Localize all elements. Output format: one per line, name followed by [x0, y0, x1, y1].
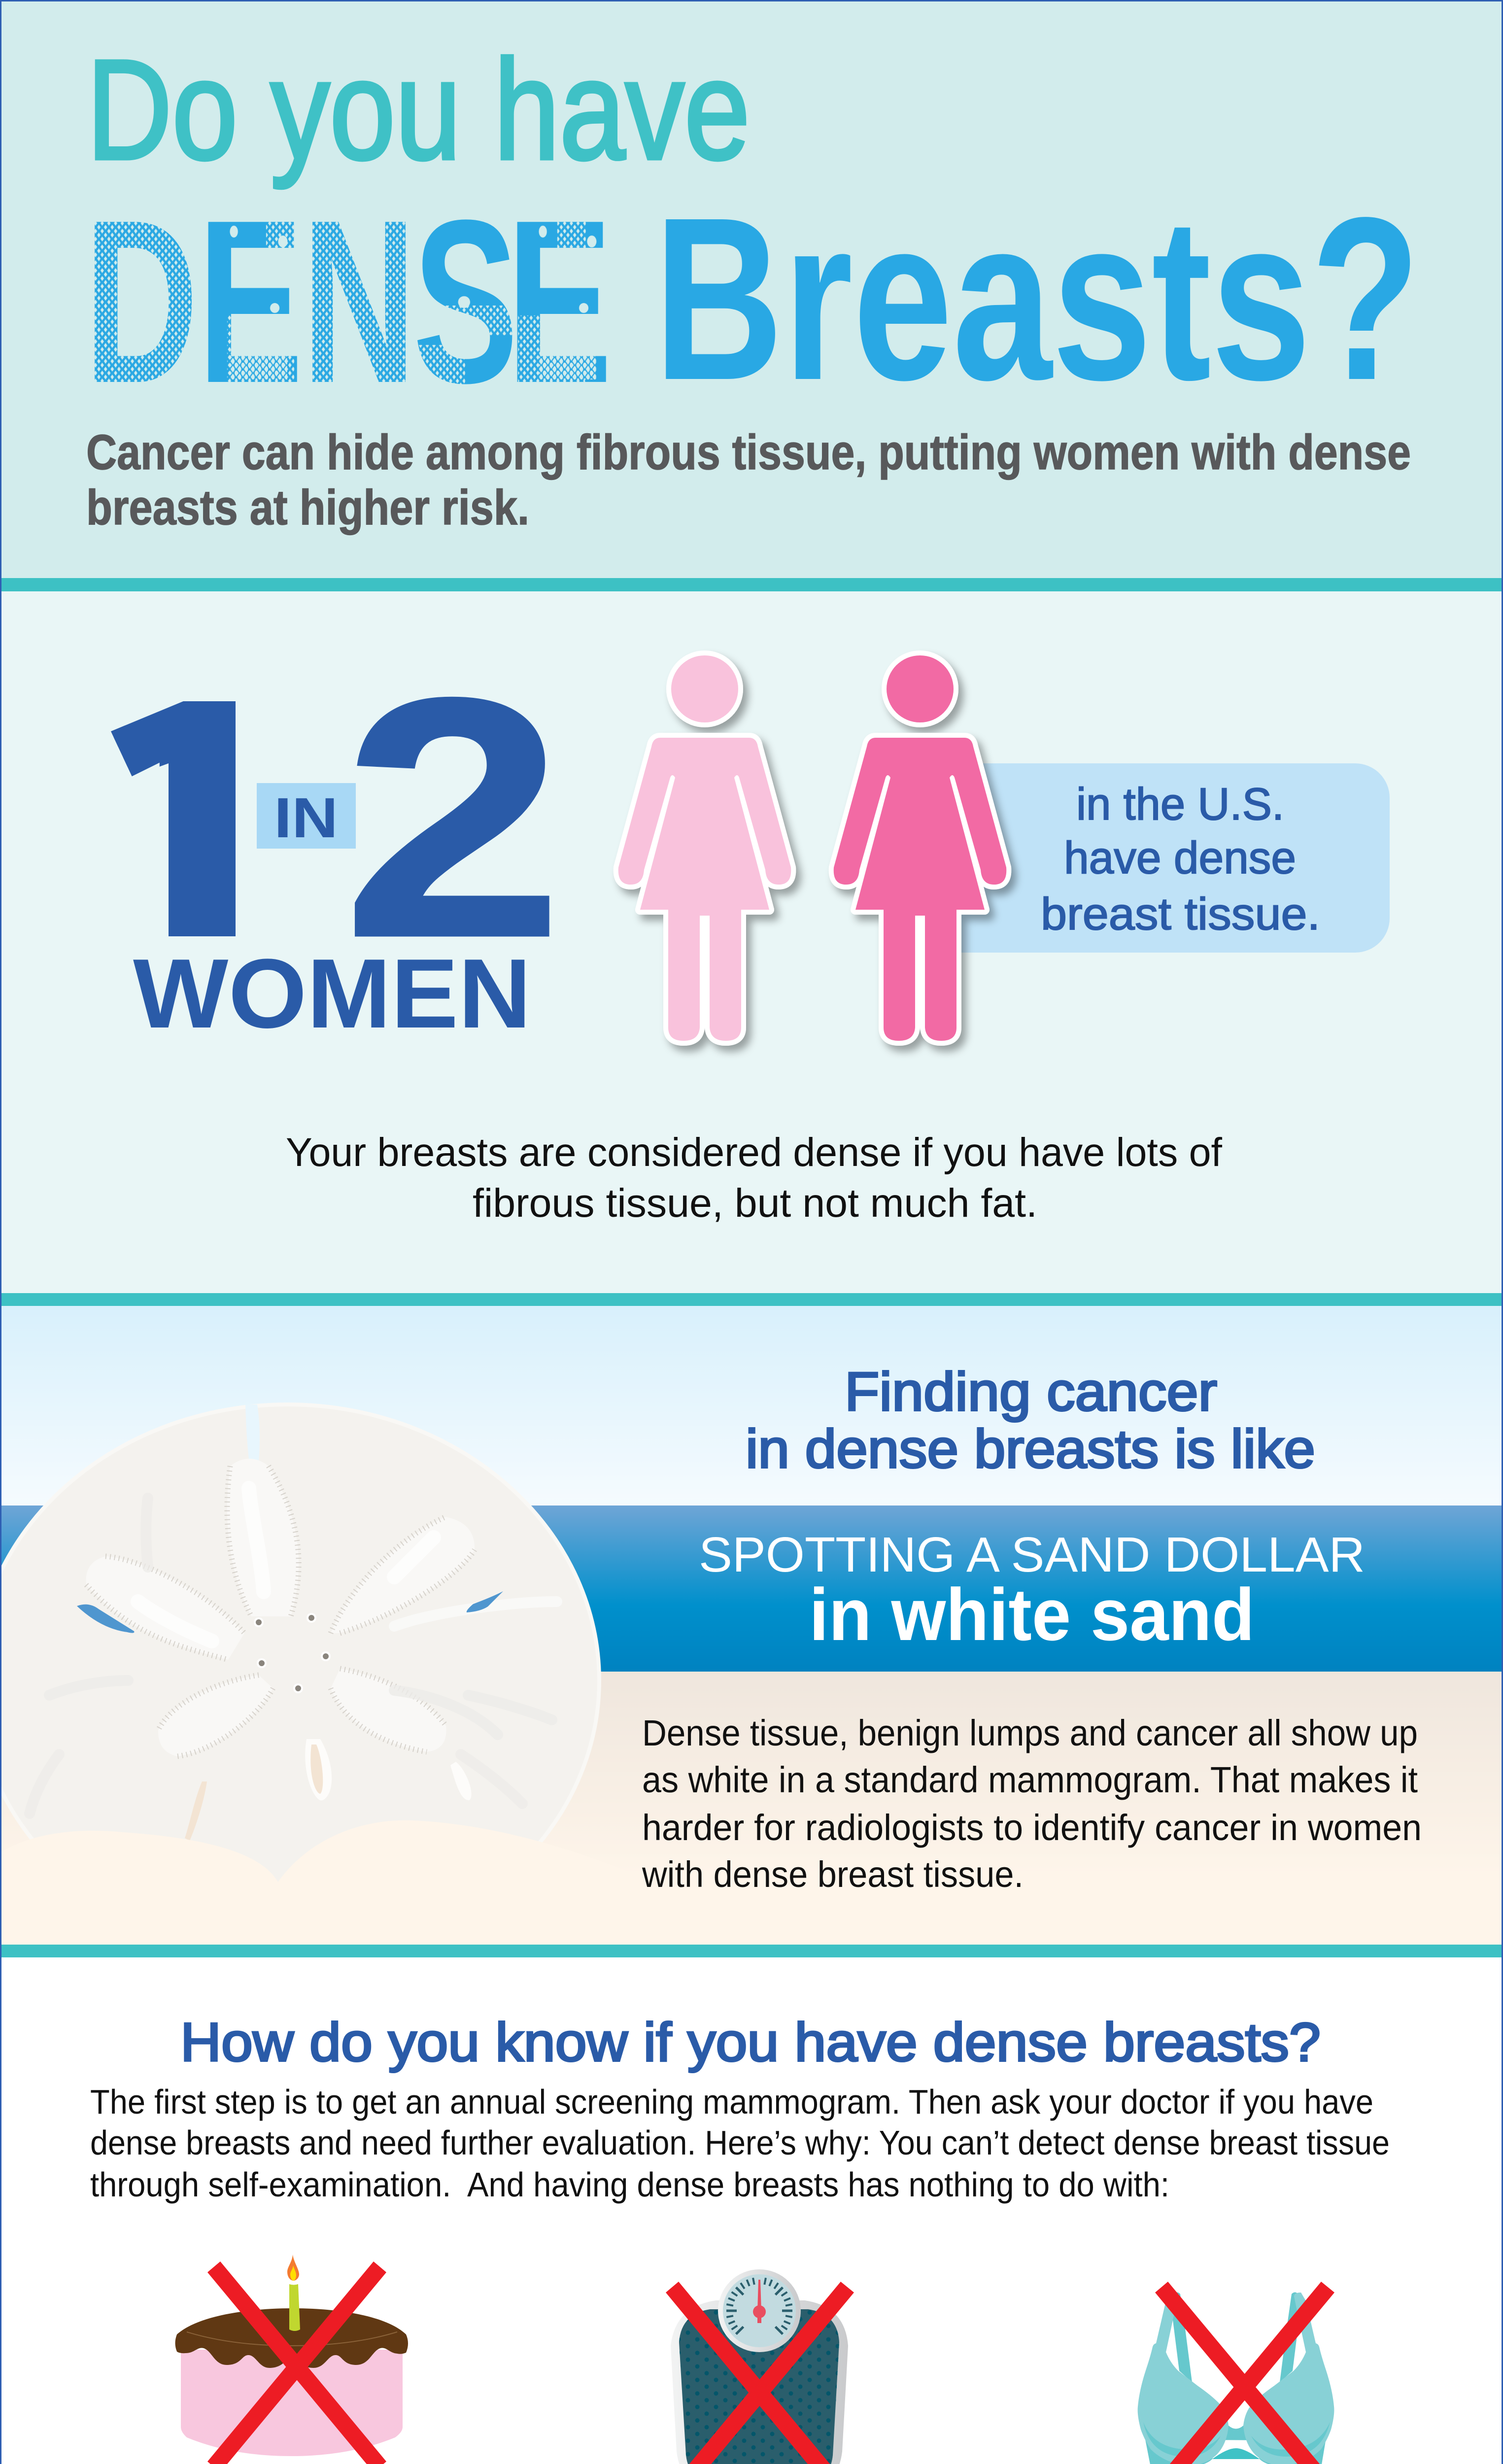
callout: in the U.S. have dense breast tissue — [887, 763, 1390, 953]
text: definition of dense breasts — [286, 1130, 1222, 1226]
banner text: spotting a sand dollar in white sand: in white sand — [809, 1573, 1255, 1656]
text: mammogram explanation — [642, 1712, 1422, 1895]
dial — [718, 2269, 801, 2352]
sand hills — [0, 1820, 631, 1945]
red cross — [666, 2282, 854, 2464]
illustration: sand dollar — [0, 1404, 631, 1956]
text: definition of dense breasts: Your breasts are considered dense if you have lots of — [286, 1130, 1222, 1175]
text: first step: through self-examination. And having dense breasts has nothing to do with: — [90, 2165, 1169, 2204]
text: first step: The first step is to get an annual screening mammogram. Then ask your doctor if you have — [90, 2083, 1373, 2121]
banner text: spotting a sand dollar in white sand — [699, 1527, 1365, 1656]
text: first step — [90, 2083, 1390, 2204]
badge: IN: IN — [274, 787, 338, 850]
stat: 1 in 2 women — [73, 628, 564, 1049]
badge: IN — [257, 783, 356, 850]
highlights — [30, 1488, 557, 1814]
text: mammogram explanation: as white in a standard mammogram. That makes it — [642, 1759, 1418, 1800]
blue slots — [77, 1605, 134, 1633]
heading: finding cancer — [746, 1362, 1315, 1479]
callout: in the U.S. have dense breast tissue: in the U.S. — [1076, 779, 1284, 829]
text: mammogram explanation: with dense breast tissue. — [642, 1854, 1024, 1895]
heading: finding cancer: in dense breasts is like — [746, 1419, 1315, 1479]
stat: 1 in 2 women: WOMEN — [133, 939, 531, 1049]
heading: distressed word DENSE: DENSE — [84, 171, 612, 432]
stat: 1 in 2 women: 1 — [73, 633, 308, 1007]
pores — [255, 1614, 330, 1692]
subtitle — [86, 425, 1411, 535]
icon: cake crossed out — [175, 2255, 408, 2464]
heading: Do you have: Do you have — [87, 31, 750, 190]
red cross — [1155, 2282, 1334, 2464]
panel: sand dollar analogy — [1, 1306, 1502, 1945]
callout: in the U.S. have dense breast tissue: have dense — [1064, 833, 1296, 883]
heading: finding cancer: Finding cancer — [845, 1362, 1217, 1422]
text: definition of dense breasts: fibrous tissue, but not much fat. — [473, 1181, 1037, 1226]
stat: 1 in 2 women: 2 — [342, 628, 564, 1008]
subtitle: breasts at higher risk. — [86, 480, 529, 535]
icon: bra crossed out — [1138, 2282, 1334, 2464]
text: first step: dense breasts and need further evaluation. Here’s why: You can’t detect dense breast tissue — [90, 2123, 1390, 2162]
icon: woman light pink — [618, 655, 791, 1041]
red cross — [207, 2261, 386, 2464]
panel: title header — [1, 1, 1502, 578]
panel: 1 in 2 women statistic — [1, 591, 1502, 1293]
banner text: spotting a sand dollar in white sand: SPOTTING A SAND DOLLAR — [699, 1527, 1365, 1582]
callout: in the U.S. have dense breast tissue: breast tissue. — [1041, 889, 1320, 939]
heading: how do you know: How do you know if you have dense breasts? — [180, 2012, 1321, 2073]
petal hatch marks — [86, 1466, 475, 1756]
icon: woman dark pink — [834, 655, 1006, 1041]
petals — [86, 1459, 475, 1756]
text: mammogram explanation: Dense tissue, benign lumps and cancer all show up — [642, 1712, 1418, 1753]
icon: scale crossed out — [666, 2269, 854, 2464]
text: mammogram explanation: harder for radiologists to identify cancer in women — [642, 1807, 1422, 1848]
panel: how do you know — [90, 2012, 1390, 2464]
